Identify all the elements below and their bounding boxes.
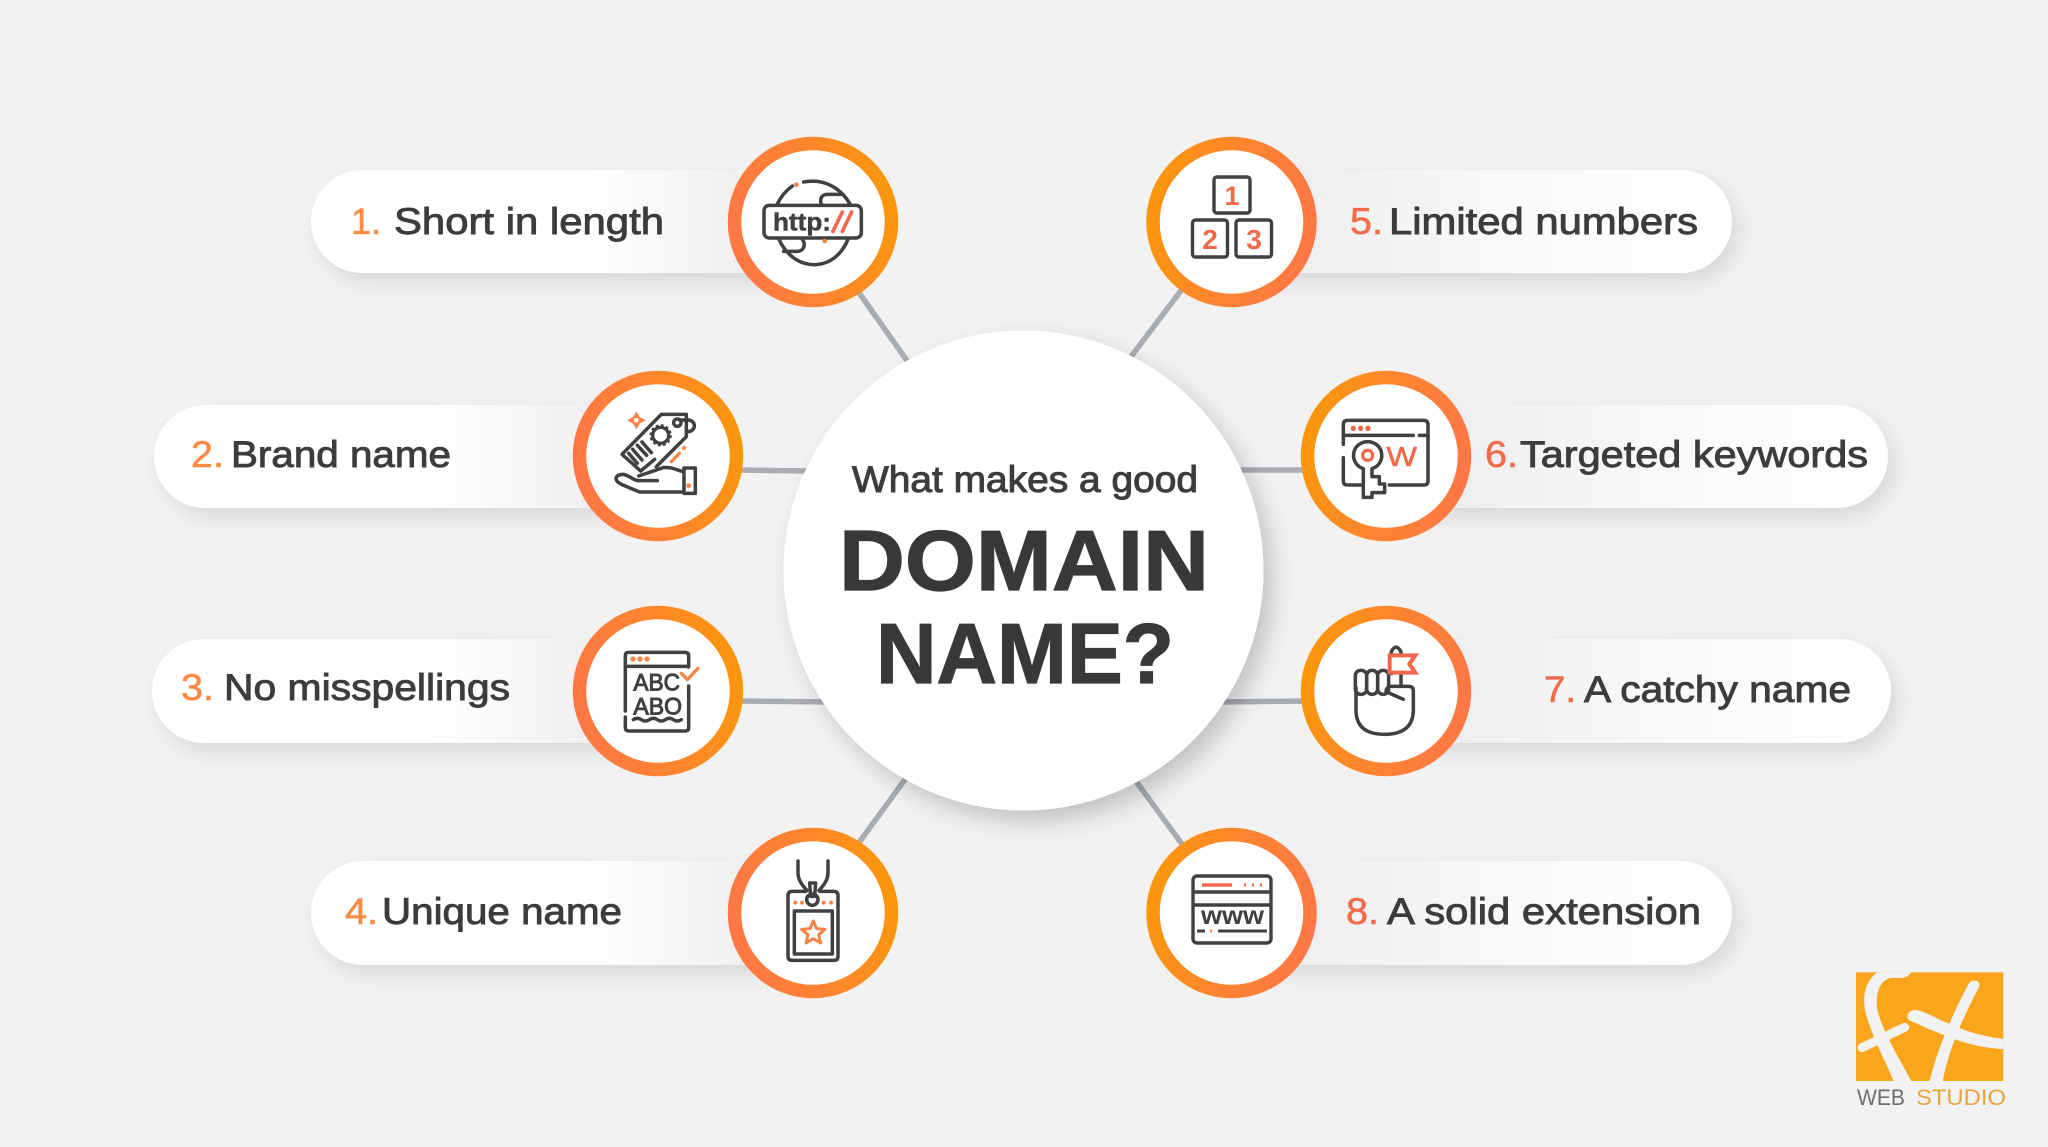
pill 3 <box>152 639 658 743</box>
icon: id badge with star <box>788 861 838 960</box>
label 3: No misspellings <box>224 667 510 708</box>
label 8: A solid extension <box>1387 891 1701 932</box>
icon: spelling window: ABO <box>633 693 682 720</box>
ring 6 <box>1308 378 1464 534</box>
panel: item 4 unique name <box>311 834 892 992</box>
number 6: 6. <box>1485 434 1518 475</box>
icon: spelling window: ABC <box>633 669 680 696</box>
icon: number blocks <box>1192 177 1272 257</box>
panel: central circle <box>784 330 1264 810</box>
logo text: WEB <box>1857 1085 1905 1110</box>
ring 8 <box>1153 834 1310 992</box>
logo mark <box>1856 970 2004 1082</box>
panel: item 5 limited numbers <box>1153 144 1732 300</box>
panel: item 7 a catchy name <box>1308 612 1891 770</box>
icon: spelling window <box>625 652 698 731</box>
number 3: 3. <box>181 667 214 708</box>
panel: item 8 a solid extension <box>1153 834 1732 992</box>
label 6: Targeted keywords <box>1520 434 1868 475</box>
ring 5 <box>1153 144 1310 300</box>
pill 5 <box>1231 170 1732 273</box>
number 1: 1. <box>351 201 381 242</box>
number 8: 8. <box>1346 891 1379 932</box>
icon: http globe <box>764 181 861 265</box>
icon: http globe: http: <box>773 209 831 236</box>
ring 1 <box>734 144 892 300</box>
logo: fx web studio <box>1856 970 2006 1110</box>
heading line 2: NAME? <box>876 607 1174 702</box>
icon: keyword window and key <box>1343 420 1428 497</box>
connector lines <box>735 276 1310 855</box>
center disc <box>784 330 1264 810</box>
label 1: Short in length <box>394 201 664 242</box>
ring 2 <box>580 378 736 534</box>
label 4: Unique name <box>382 891 622 932</box>
icon: www browser: www <box>1200 902 1265 930</box>
label 5: Limited numbers <box>1389 201 1698 242</box>
icon: number blocks: 3 <box>1246 224 1262 255</box>
icon: number blocks: 1 <box>1224 181 1240 211</box>
pill 7 <box>1386 639 1891 743</box>
ring 7 <box>1308 612 1464 770</box>
number 2: 2. <box>191 434 224 475</box>
ring 4 <box>734 834 892 992</box>
pill 4 <box>311 861 813 965</box>
label 2: Brand name <box>231 434 451 475</box>
panel: item 1 short in length <box>311 144 892 300</box>
number 7: 7. <box>1544 669 1576 710</box>
number 5: 5. <box>1350 201 1383 242</box>
icon: www browser <box>1193 876 1271 943</box>
pill 1 <box>311 170 813 273</box>
pill 6 <box>1386 405 1888 508</box>
heading line 1: DOMAIN <box>839 514 1209 609</box>
panel: item 2 brand name <box>154 378 736 534</box>
icon: price tag on hand <box>616 411 695 493</box>
pill 2 <box>154 405 658 508</box>
icon: number blocks: 2 <box>1202 224 1218 255</box>
icon: keyword window and key: W <box>1386 441 1418 472</box>
label 7: A catchy name <box>1584 669 1851 710</box>
icon: hand with flag <box>1355 647 1415 734</box>
panel: item 6 targeted keywords <box>1308 378 1888 534</box>
logo: fx web studio: STUDIO <box>1916 1085 2006 1110</box>
panel: item 3 no misspellings <box>152 612 736 770</box>
ring 3 <box>580 612 736 770</box>
subtitle: What makes a good <box>852 459 1198 500</box>
pill 8 <box>1231 861 1732 965</box>
number 4: 4. <box>345 891 378 932</box>
